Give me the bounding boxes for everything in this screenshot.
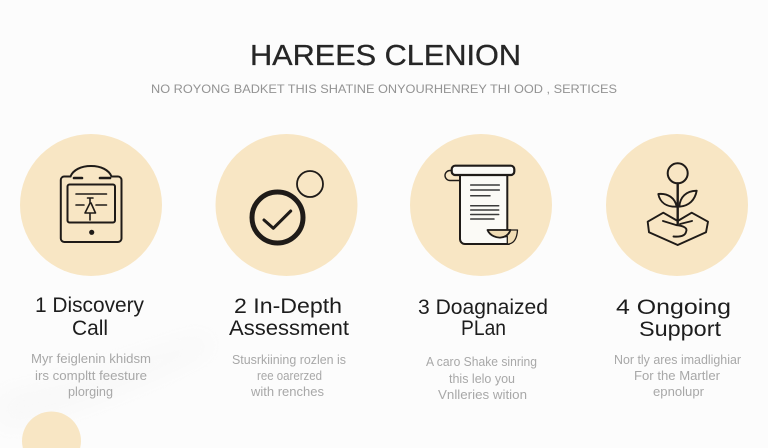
step 2 description: Stusrkiining rozlen is — [232, 353, 346, 367]
step 1 description: plorging — [68, 385, 113, 399]
step 4 circle — [606, 134, 748, 276]
step 1 description: Myr feiglenin khidsm — [31, 352, 151, 366]
step 4 heading — [616, 296, 731, 341]
step 2: in-depth assessment — [216, 134, 358, 399]
step 3 description: A caro Shake sinring — [426, 355, 537, 369]
icon: paper scroll — [445, 166, 518, 244]
step 3 heading: PLan — [461, 317, 506, 340]
step 4 description — [614, 353, 741, 399]
step 1 heading — [35, 294, 144, 340]
step 1 description — [31, 352, 151, 399]
step 2 description: ree oarerzed — [257, 369, 322, 383]
step 1: discovery call — [20, 134, 162, 399]
step 4 description: Nor tly ares imadlighiar — [614, 353, 741, 367]
step 4: ongoing support — [606, 134, 748, 399]
step 3 description — [426, 355, 537, 402]
step 2 heading — [229, 295, 349, 340]
step 2 description: with renches — [250, 385, 324, 399]
step 3 description: Vnlleries wition — [438, 388, 527, 402]
step 1 heading: 1 Discovery — [35, 294, 144, 317]
step 2 heading: 2 In-Depth — [234, 295, 342, 318]
step 4 heading: Support — [639, 318, 721, 341]
step 1 circle — [20, 134, 162, 276]
step 4 description: For the Martler — [634, 369, 720, 383]
step 2 circle — [216, 134, 358, 276]
step 3: customized plan — [410, 134, 552, 402]
step 4 description: epnolupr — [653, 385, 704, 399]
subtitle: NO ROYONG BADKET THIS SHATINE ONYOURHENREY THI OOD , SERTICES — [151, 82, 617, 96]
icon: hands holding plant — [648, 163, 708, 245]
step 4 heading: 4 Ongoing — [616, 296, 731, 319]
step 3 heading: 3 Doagnaized — [418, 296, 548, 319]
step 3 heading — [418, 296, 548, 340]
step 2 heading: Assessment — [229, 317, 349, 340]
decorative bottom circle — [22, 411, 81, 448]
step 1 heading: Call — [72, 317, 108, 340]
step 3 description: this lelo you — [449, 372, 515, 386]
step 1 description: irs compltt feesture — [35, 369, 147, 383]
title: HAREES CLENION — [250, 40, 521, 72]
icon: tablet device — [61, 166, 122, 242]
step 2 description — [232, 353, 346, 399]
step 3 circle — [410, 134, 552, 276]
icon: check mark badge — [252, 171, 323, 243]
